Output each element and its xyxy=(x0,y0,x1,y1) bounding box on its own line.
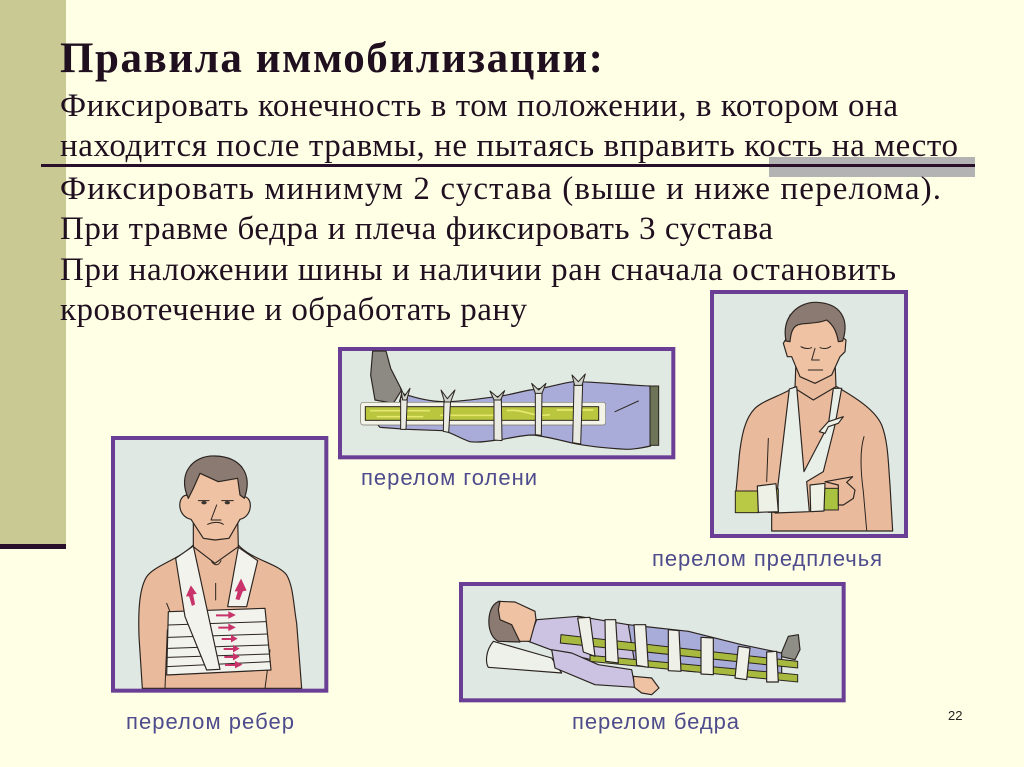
bandages xyxy=(578,617,778,682)
hand xyxy=(633,676,659,695)
decorative left band xyxy=(0,0,66,549)
padded splint xyxy=(361,402,606,425)
leg in trousers xyxy=(375,382,651,449)
panel: rib fracture xyxy=(113,438,326,691)
head xyxy=(180,456,250,563)
sweater torso xyxy=(528,616,635,665)
neck and head xyxy=(783,302,846,400)
icon: boot xyxy=(371,351,402,403)
text block: immobilization rules: находится после травмы, не пытаясь вправить кость на место xyxy=(60,128,958,164)
text block: immobilization rules: Фиксировать конечность в том положении, в котором она xyxy=(60,88,898,124)
icon: triangular sling xyxy=(775,387,842,513)
caption: forearm fracture: перелом предплечья xyxy=(652,546,882,571)
decorative header rule with grey block xyxy=(41,157,975,177)
splint on forearm xyxy=(735,477,855,513)
boot xyxy=(780,635,800,660)
text block: immobilization rules: кровотечение и обработать рану xyxy=(60,292,528,328)
panel: forearm fracture xyxy=(712,292,906,536)
head xyxy=(489,601,536,642)
caption: rib fracture: перелом ребер xyxy=(126,709,294,734)
upper strap xyxy=(650,386,659,445)
slide number: 22 xyxy=(948,708,962,723)
title: Правила иммобилизации: xyxy=(60,35,603,82)
icon: red arrows xyxy=(187,580,246,667)
sling knot xyxy=(819,417,843,433)
torso and arms xyxy=(736,387,893,531)
legs in trousers xyxy=(628,625,782,675)
text block: immobilization rules: При травме бедра и плеча фиксировать 3 сустава xyxy=(60,211,773,247)
caption: lower leg fracture: перелом голени xyxy=(361,465,537,490)
torso and arms xyxy=(139,545,302,688)
caption: femur fracture: перелом бедра xyxy=(572,709,740,734)
text block: immobilization rules: Фиксировать минимум 2 сустава (выше и ниже перелома). xyxy=(60,171,941,207)
panel: lower leg fracture xyxy=(340,349,673,457)
wooden splints xyxy=(560,635,798,682)
arm xyxy=(552,650,635,687)
pillow xyxy=(487,641,562,673)
shoulder straps xyxy=(176,546,258,670)
wooden splint xyxy=(365,407,599,420)
text block: immobilization rules xyxy=(60,88,958,328)
chest bandage rolls xyxy=(167,608,271,675)
panel: femur fracture xyxy=(461,584,844,700)
bandage ties xyxy=(401,374,585,444)
text block: immobilization rules: При наложении шины и наличии ран сначала остановить xyxy=(60,252,896,288)
